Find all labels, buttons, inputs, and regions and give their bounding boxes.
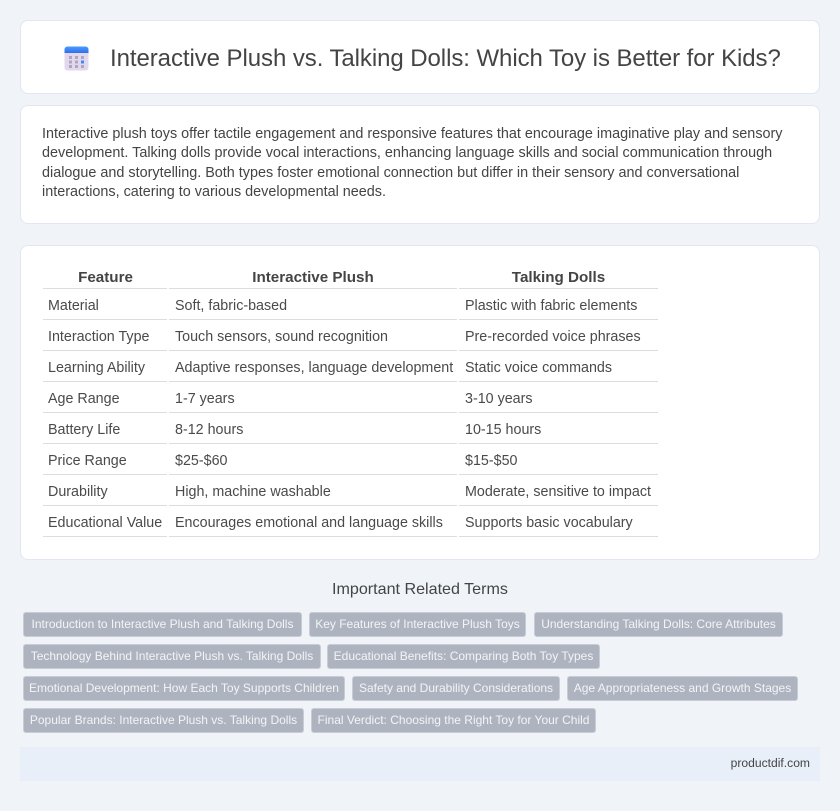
table rows: $25-$60 [175, 453, 227, 469]
table rows: High, machine washable [175, 484, 331, 500]
table rows: Educational Value [48, 515, 162, 531]
tags: related terms: Safety and Durability Considerations [359, 681, 553, 695]
footer source: productdif.com [731, 756, 810, 770]
table rows: 1-7 years [175, 391, 235, 407]
tags: related terms: Technology Behind Interactive Plush vs. Talking Dolls [31, 649, 313, 663]
tags: related terms: Introduction to Interactive Plush and Talking Dolls [32, 617, 293, 631]
table rows: Learning Ability [48, 360, 145, 376]
table headers [78, 269, 605, 286]
intro text: Interactive plush toys offer tactile engagement and responsive features that encourage imaginative play and sensory [42, 126, 782, 142]
panel: introduction [20, 105, 820, 224]
table rows: 8-12 hours [175, 422, 243, 438]
table rows: Material [48, 298, 99, 314]
table rows: Pre-recorded voice phrases [465, 329, 641, 345]
table headers: Feature [78, 269, 133, 286]
tags: related terms: Educational Benefits: Comparing Both Toy Types [334, 649, 593, 663]
table headers: Talking Dolls [512, 269, 605, 286]
intro text: dialogue and storytelling. Both types foster emotional connection but differ in their sensory and conversational [42, 165, 739, 181]
header panel [20, 20, 820, 94]
table rows: 10-15 hours [465, 422, 541, 438]
heading: related terms: Important Related Terms [332, 580, 508, 598]
table rows: $15-$50 [465, 453, 517, 469]
tags: related terms: Age Appropriateness and Growth Stages [574, 681, 791, 695]
footer bar [20, 747, 820, 781]
icon: calendar grid [64, 46, 88, 70]
tags: related terms: Key Features of Interactive Plush Toys [315, 617, 520, 631]
table rows: Durability [48, 484, 108, 500]
tags: related terms: Final Verdict: Choosing the Right Toy for Your Child [318, 713, 589, 727]
tags: related terms [23, 612, 798, 733]
table rows: Price Range [48, 453, 127, 469]
table headers: Interactive Plush [252, 269, 374, 286]
table rows: Static voice commands [465, 360, 612, 376]
table rows: Supports basic vocabulary [465, 515, 633, 531]
table rows: Plastic with fabric elements [465, 298, 637, 314]
intro text: interactions, catering to various developmental needs. [42, 184, 386, 200]
table rows: Moderate, sensitive to impact [465, 484, 651, 500]
tags: related terms: Popular Brands: Interactive Plush vs. Talking Dolls [30, 713, 297, 727]
title: Interactive Plush vs. Talking Dolls: Which Toy is Better for Kids? [110, 45, 781, 72]
intro text [42, 126, 782, 200]
table rows: 3-10 years [465, 391, 533, 407]
tags: related terms: Emotional Development: How Each Toy Supports Children [29, 681, 339, 695]
intro text: development. Talking dolls provide vocal interactions, enhancing language skills and social communication through [42, 145, 772, 161]
table rows: Encourages emotional and language skills [175, 515, 443, 531]
table rows: Interaction Type [48, 329, 149, 345]
tags: related terms: Understanding Talking Dolls: Core Attributes [541, 617, 776, 631]
table rows: Battery Life [48, 422, 120, 438]
table rows: Touch sensors, sound recognition [175, 329, 388, 345]
table rows: Soft, fabric-based [175, 298, 287, 314]
table rows [43, 288, 658, 537]
table rows: Adaptive responses, language development [175, 360, 453, 376]
table rows: Age Range [48, 391, 120, 407]
panel: comparison table [20, 245, 820, 560]
